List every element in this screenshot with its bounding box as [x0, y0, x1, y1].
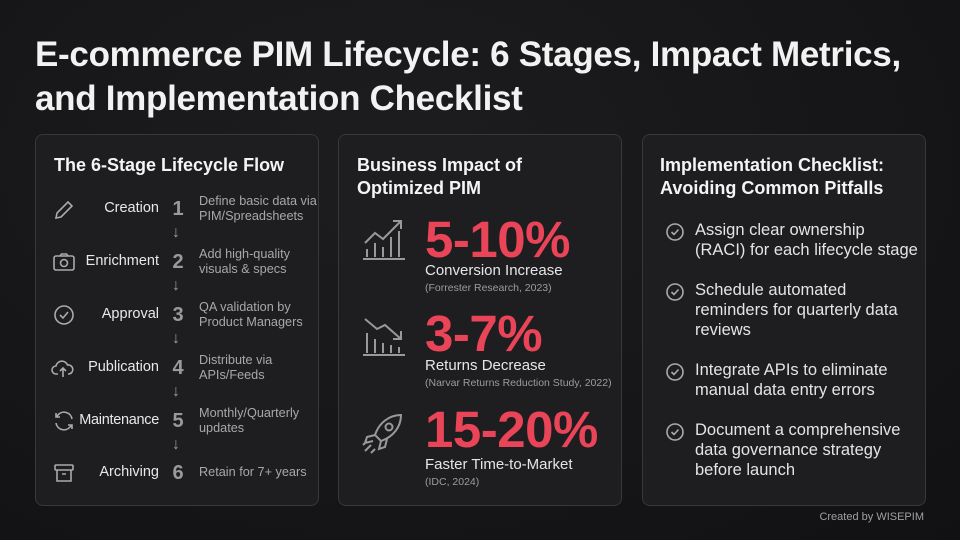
stage 5 desc: Monthly/Quarterly: [199, 406, 299, 420]
text: [695, 281, 898, 339]
stage 4 desc: APIs/Feeds: [199, 368, 265, 382]
metric 3 label: Faster Time-to-Market: [425, 456, 573, 473]
metric 2 source: (Narvar Returns Reduction Study, 2022): [425, 377, 612, 389]
metric 3 value: 15-20%: [425, 401, 598, 458]
text: (RACI) for each lifecycle stage: [695, 241, 918, 259]
text: manual data entry errors: [695, 381, 875, 399]
title: and Implementation Checklist: [35, 79, 523, 118]
checklist item 2: [666, 281, 898, 339]
icon: refresh: [55, 411, 73, 431]
panel: business impact: [338, 134, 622, 506]
icon: check: [666, 283, 684, 301]
stage 3 label: Approval: [102, 306, 159, 322]
title: E-commerce PIM Lifecycle: 6 Stages, Impact Metrics,: [35, 35, 901, 74]
heading: lifecycle: The 6-Stage Lifecycle Flow: [54, 155, 284, 175]
metric 1 value: 5-10%: [425, 211, 570, 268]
stage 4 desc: [199, 353, 272, 382]
arrow: ↓: [172, 277, 180, 294]
checklist item 4: [666, 421, 900, 479]
stage 1 label: Creation: [104, 200, 159, 216]
stage 6 label: Archiving: [99, 464, 159, 480]
arrow: ↓: [172, 330, 180, 347]
icon: check: [666, 423, 684, 441]
stage 2 number: 2: [172, 251, 184, 273]
text: before launch: [695, 461, 795, 479]
metric 1 source: (Forrester Research, 2023): [425, 282, 552, 294]
heading: checklist: [660, 155, 884, 198]
text: data governance strategy: [695, 441, 881, 459]
metric 2 value: 3-7%: [425, 305, 542, 362]
stage 2 desc: Add high-quality: [199, 247, 290, 261]
stage 4 desc: Distribute via: [199, 353, 272, 367]
stage 3 desc: QA validation by: [199, 300, 291, 314]
text: Integrate APIs to eliminate: [695, 361, 888, 379]
stage 4 number: 4: [172, 357, 184, 379]
stage 5 desc: updates: [199, 421, 244, 435]
checklist item 3: [666, 361, 888, 399]
stage 6 desc: Retain for 7+ years: [199, 465, 307, 479]
stage 2 label: Enrichment: [86, 253, 159, 269]
heading: impact: Optimized PIM: [357, 178, 481, 198]
metric 2 label: Returns Decrease: [425, 357, 546, 374]
text: Schedule automated: [695, 281, 846, 299]
footer credit: Created by WISEPIM: [819, 511, 924, 523]
icon: rocket: [362, 414, 402, 454]
icon: pencil: [55, 201, 73, 219]
text: [695, 361, 888, 399]
checklist item 1: [666, 221, 918, 259]
stage 4 label: Publication: [88, 359, 159, 375]
text: reminders for quarterly data: [695, 301, 898, 319]
stage 1 number: 1: [172, 198, 184, 220]
stage 3 desc: [199, 300, 303, 329]
icon: archive: [54, 464, 74, 482]
stage 3 number: 3: [172, 304, 184, 326]
icon: cloud upload: [51, 360, 74, 377]
stage 6 number: 6: [172, 462, 184, 484]
stage 5 number: 5: [172, 410, 184, 432]
title: [35, 35, 901, 118]
arrow: ↓: [172, 383, 180, 400]
icon: check: [666, 223, 684, 241]
stage 1 desc: PIM/Spreadsheets: [199, 209, 303, 223]
metric 3 source: (IDC, 2024): [425, 476, 479, 488]
heading: checklist: Implementation Checklist:: [660, 155, 884, 175]
heading: impact: Business Impact of: [357, 155, 522, 175]
stage 5 label: Maintenance: [79, 412, 159, 428]
icon: chart up: [363, 220, 405, 260]
text: [695, 421, 900, 479]
arrow: ↓: [172, 224, 180, 241]
stage 5 desc: [199, 406, 299, 435]
text: reviews: [695, 321, 751, 339]
metric 1 label: Conversion Increase: [425, 262, 563, 279]
stage 1 desc: Define basic data via: [199, 194, 317, 208]
icon: camera: [53, 253, 75, 271]
icon: chart down: [363, 318, 405, 356]
heading: impact: [357, 155, 522, 198]
heading: checklist: Avoiding Common Pitfalls: [660, 178, 883, 198]
stage 2 desc: visuals & specs: [199, 262, 286, 276]
text: [695, 221, 918, 259]
icon: check circle: [54, 305, 74, 325]
panel: checklist: [642, 134, 926, 506]
text: Assign clear ownership: [695, 221, 865, 239]
stage 2 desc: [199, 247, 290, 276]
stage 1 desc: [199, 194, 317, 223]
stage 3 desc: Product Managers: [199, 315, 303, 329]
text: Document a comprehensive: [695, 421, 900, 439]
arrow: ↓: [172, 436, 180, 453]
panel: lifecycle flow: [35, 134, 319, 506]
icon: check: [666, 363, 684, 381]
